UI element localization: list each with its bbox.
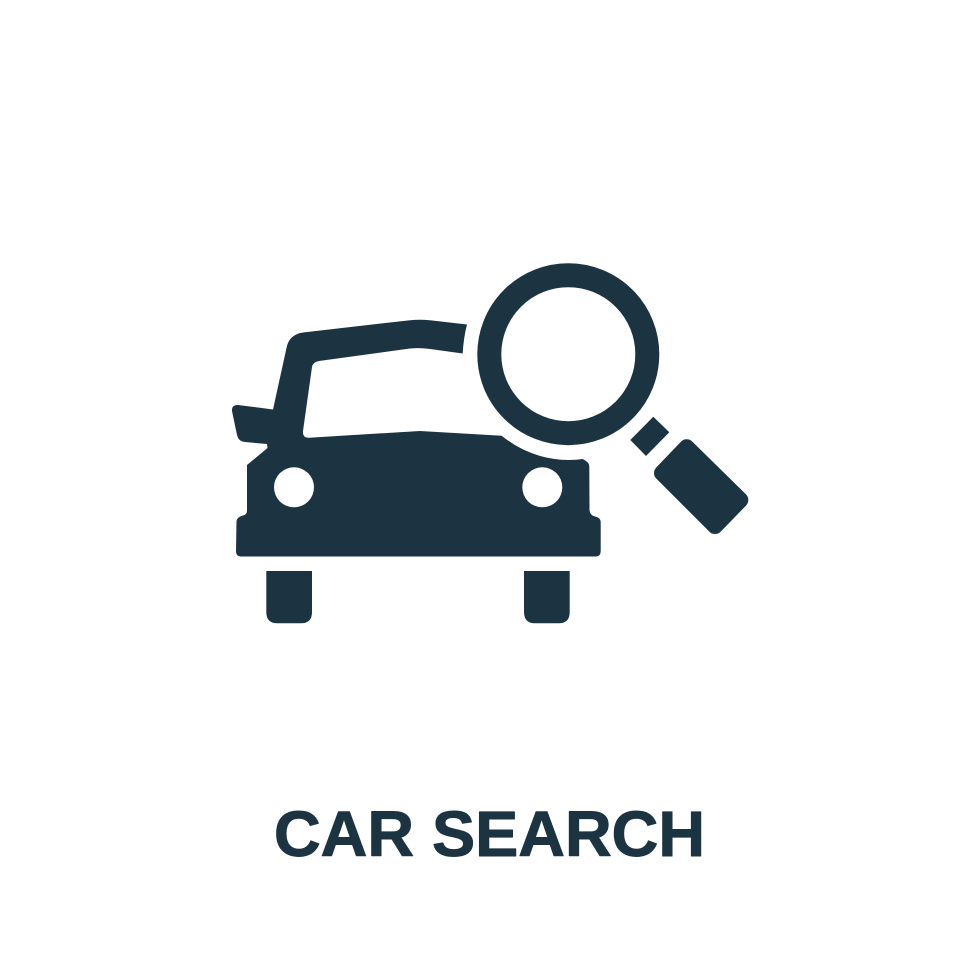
right wheel	[524, 571, 570, 623]
handle collar	[630, 417, 669, 456]
right headlight	[522, 467, 562, 507]
left headlight	[274, 467, 314, 507]
icon: magnifying glass	[489, 275, 740, 526]
title: CAR SEARCH	[274, 798, 705, 870]
handle grip	[662, 447, 740, 526]
icon: car	[232, 320, 601, 623]
lens ring	[489, 275, 647, 433]
left wheel	[266, 571, 312, 623]
car body with windshield opening	[232, 320, 601, 556]
